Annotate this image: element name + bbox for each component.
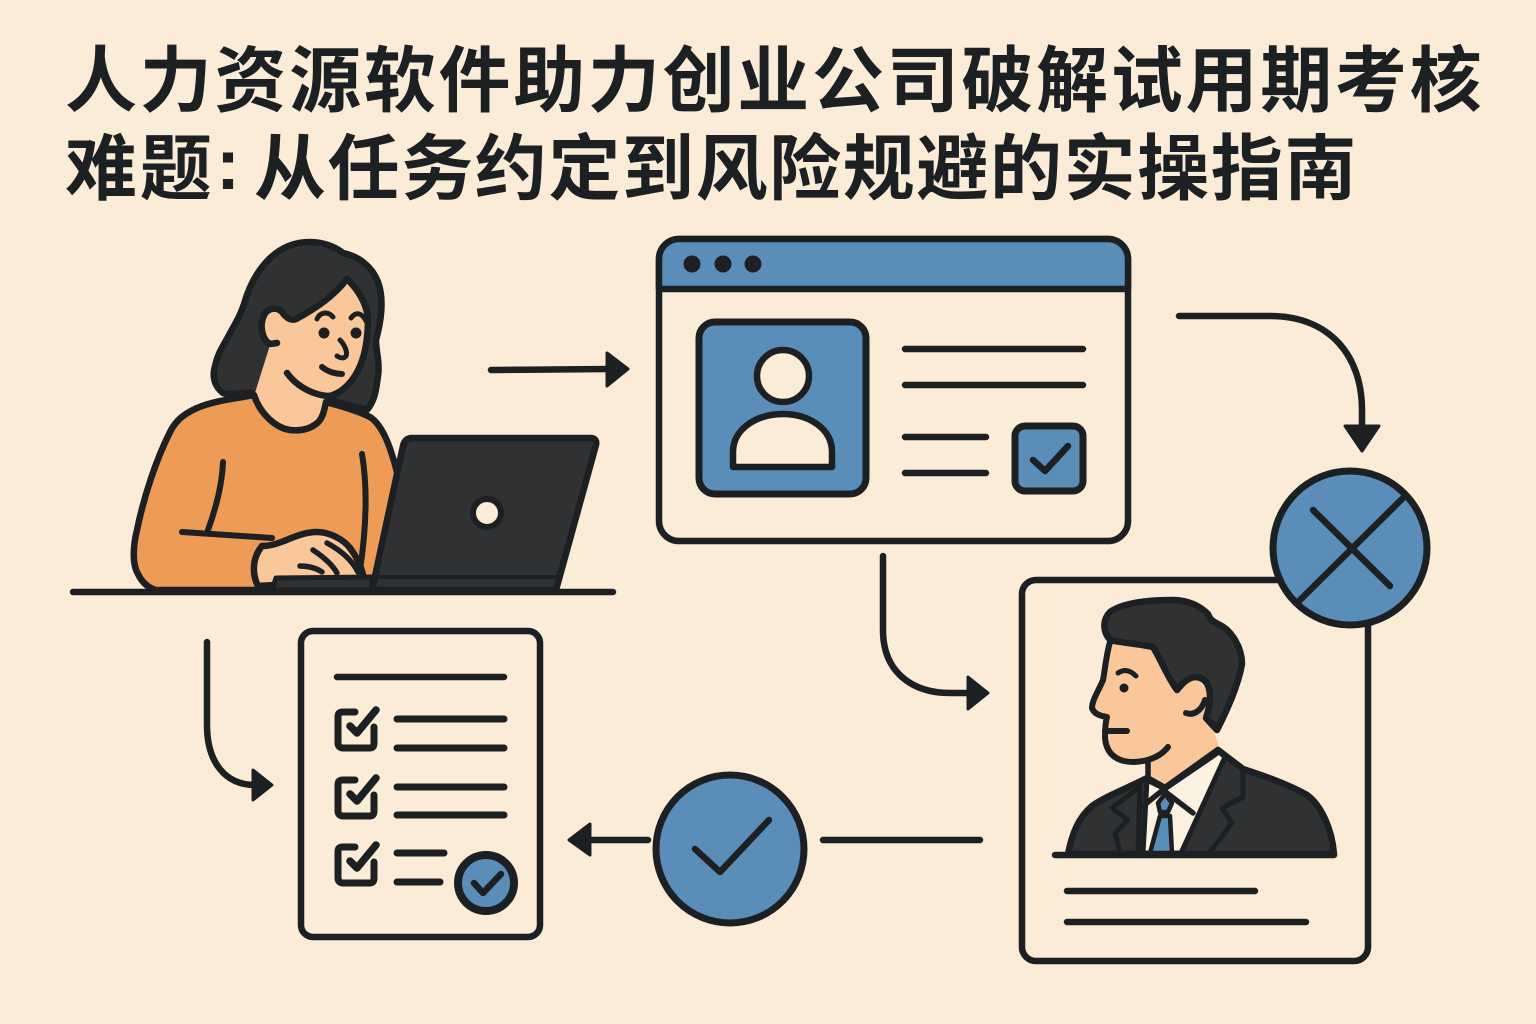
arrow: manager to check (823, 837, 980, 843)
avatar card (699, 322, 866, 494)
caption lines (1067, 891, 1306, 922)
icon: check circle (656, 775, 804, 923)
title: 难题 (65, 130, 214, 210)
text lines (905, 349, 1083, 473)
arrow: woman to checklist (207, 642, 272, 800)
panel: software profile window (659, 239, 1128, 541)
face details (317, 313, 366, 321)
laptop (372, 438, 596, 590)
window title bar (659, 239, 1128, 289)
face details (1120, 684, 1128, 692)
face outline (1092, 642, 1168, 762)
hair (1104, 600, 1242, 730)
arrow: window to manager (883, 556, 988, 709)
arrow: window to X (1179, 316, 1379, 451)
illustration: woman at laptop (73, 242, 613, 592)
title: 从任务约定到风险规避的实操指南 (254, 130, 1358, 210)
neck and face (254, 279, 368, 431)
title: 人力资源软件助力创业公司破解试用期考核 (65, 42, 1484, 122)
sweater (134, 395, 398, 590)
panel: checklist (301, 631, 540, 937)
suit (1068, 750, 1334, 854)
shirt (1143, 752, 1225, 853)
panel: manager card (1022, 580, 1368, 961)
ear (1186, 700, 1205, 714)
sweater folds (208, 454, 366, 570)
badge check (458, 855, 514, 911)
hand (254, 532, 364, 586)
lapels (1112, 769, 1243, 852)
title (65, 42, 1484, 210)
neck and face (1092, 641, 1220, 788)
icon: X circle (1273, 471, 1427, 625)
arrow: woman to profile window (491, 353, 628, 386)
tie (1150, 794, 1172, 853)
checkbox 2 (338, 780, 374, 816)
checkbox 1 (338, 712, 374, 748)
face outline (262, 279, 368, 396)
title: : (216, 125, 240, 205)
desk (73, 589, 613, 595)
hair (214, 242, 382, 410)
checkbox 3 (338, 847, 374, 883)
checkbox (1015, 426, 1083, 491)
arrow: check to checklist (569, 824, 648, 855)
